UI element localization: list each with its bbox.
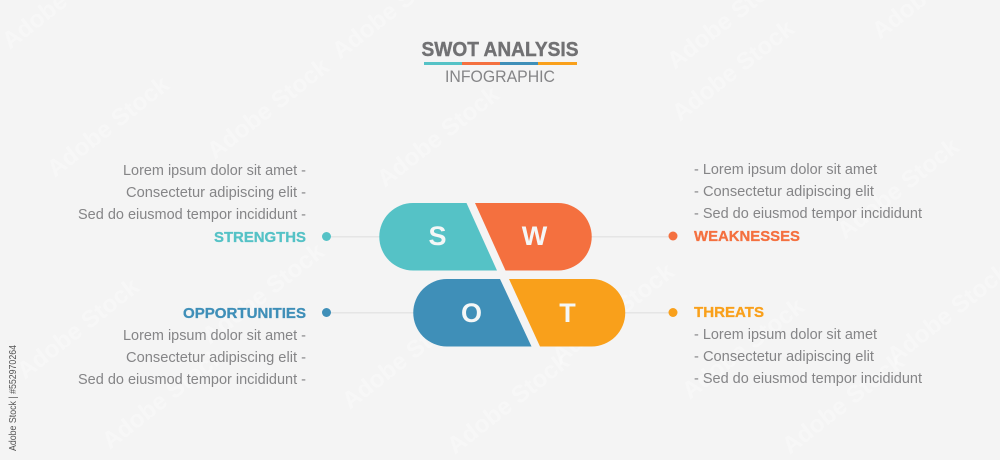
connector: threats — [618, 308, 678, 317]
text block: opportunities: Consectetur adipiscing elit - — [126, 350, 306, 366]
segment: O: O — [461, 298, 482, 328]
text block: threats — [694, 304, 922, 387]
text: Adobe Stock — [42, 71, 175, 183]
text block: opportunities: OPPORTUNITIES — [183, 305, 306, 322]
text block: weaknesses: - Sed do eiusmod tempor incididunt — [694, 206, 922, 222]
text: Adobe Stock — [677, 293, 810, 405]
text block: opportunities: Lorem ipsum dolor sit amet - — [123, 328, 306, 344]
segment: S: S — [428, 221, 447, 251]
text: Adobe Stock — [372, 81, 505, 193]
text: Adobe Stock — [777, 348, 910, 460]
text: Adobe Stock — [442, 348, 575, 460]
segment: S — [379, 203, 497, 270]
text: Adobe Stock — [667, 15, 800, 127]
segment: W: W — [522, 221, 548, 251]
subtitle: INFOGRAPHIC — [445, 68, 555, 86]
text block: strengths: STRENGTHS — [214, 229, 306, 246]
connector: strengths — [322, 232, 387, 241]
text block: weaknesses: - Lorem ipsum dolor sit amet — [694, 162, 877, 178]
text block: strengths: Consectetur adipiscing elit - — [126, 185, 306, 201]
title: SWOT ANALYSIS — [422, 39, 578, 61]
text block: strengths: Lorem ipsum dolor sit amet - — [123, 163, 306, 179]
text: Adobe Stock — [197, 238, 330, 350]
text: Adobe Stock — [202, 53, 335, 165]
connector: weaknesses — [585, 232, 678, 240]
segment: W — [475, 203, 592, 270]
text block: weaknesses — [694, 162, 922, 245]
connector: opportunities — [322, 308, 419, 317]
stock credit: Adobe Stock | #552970264 — [7, 345, 19, 451]
text block: opportunities: Sed do eiusmod tempor incididunt - — [78, 372, 306, 388]
text block: threats: - Sed do eiusmod tempor incididunt — [694, 371, 922, 387]
text: Adobe Stock — [97, 343, 230, 455]
title colour bar — [424, 62, 577, 65]
text block: threats: - Lorem ipsum dolor sit amet — [694, 327, 877, 343]
text: Adobe Stock — [12, 273, 145, 385]
segment: T — [509, 279, 625, 346]
text: Adobe Stock — [337, 303, 470, 415]
text block: strengths — [78, 163, 306, 246]
text block: threats: - Consectetur adipiscing elit — [694, 349, 874, 365]
text block: strengths: Sed do eiusmod tempor incididunt - — [78, 207, 306, 223]
text block: opportunities — [78, 305, 306, 388]
segment: O — [413, 279, 532, 346]
text block: weaknesses: - Consectetur adipiscing elit — [694, 184, 874, 200]
text: Adobe Stock — [832, 133, 965, 245]
text: Adobe Stock — [547, 258, 680, 370]
text block: threats: THREATS — [694, 304, 764, 321]
text block: weaknesses: WEAKNESSES — [694, 228, 800, 245]
segment: T: T — [559, 298, 576, 328]
